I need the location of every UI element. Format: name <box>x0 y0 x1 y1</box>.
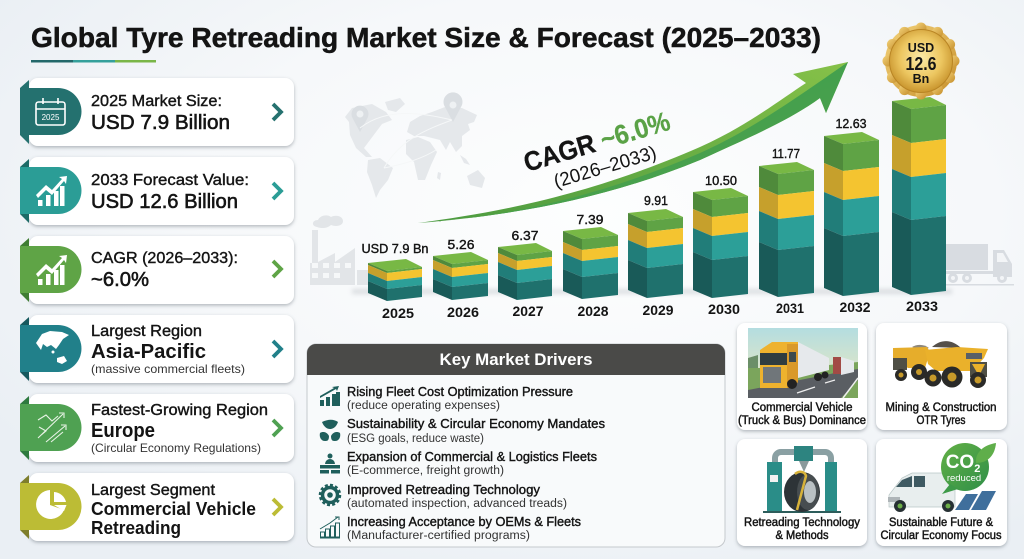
growth arrow <box>418 62 848 223</box>
KPI card: CAGR <box>20 236 294 304</box>
illustration: mining dump trucks <box>893 341 988 388</box>
icon: Asia-Pacific map <box>36 331 69 364</box>
gold medal: USD 12.6 Bn: 12.6 <box>906 53 936 74</box>
driver 2: sustainability <box>320 416 606 445</box>
KPI card: largest region: Asia-Pacific <box>91 341 206 363</box>
driver 5: OEM acceptance <box>320 514 581 542</box>
KPI card: largest segment: Commercial Vehicle <box>91 499 256 519</box>
KPI card: 2033 forecast value <box>20 157 294 225</box>
KPI card: 2033 forecast value: USD 12.6 Billion <box>91 190 238 213</box>
driver 5: OEM acceptance: (Manufacturer-certified programs) <box>347 530 530 542</box>
KPI card: largest region: (massive commercial fleets) <box>91 362 245 376</box>
KPI card: fastest-growing region: (Circular Economy Regulations) <box>91 441 261 455</box>
KPI card: largest segment: Retreading <box>91 518 181 538</box>
KPI card: fastest-growing region <box>20 394 294 462</box>
ground shadow under bars <box>352 289 952 294</box>
bar value labels: 5.26 <box>448 238 475 252</box>
tile: sustainable future: Sustainable Future & <box>889 517 993 529</box>
gold medal: USD 12.6 Bn: Bn <box>913 72 929 86</box>
illustration: van, solar panels, CO2 badge <box>888 443 996 512</box>
icon: logistics boxes <box>320 454 340 474</box>
KPI card: 2033 forecast value: 2033 Forecast Value: <box>91 172 249 189</box>
illustration: trucks on highway <box>748 328 858 398</box>
driver 1: cost optimization: Rising Fleet Cost Optimization Pressure <box>347 384 573 399</box>
driver 3: logistics fleets: Expansion of Commercial & Logistics Fleets <box>347 449 597 464</box>
panel header: Key Market Drivers <box>440 351 592 369</box>
tile: commercial vehicle <box>737 323 867 430</box>
driver 4: technology: Improved Retreading Technology <box>347 482 541 497</box>
tile: sustainable future <box>876 439 1007 546</box>
illustration: van, solar panels, CO2 badge: 2 <box>974 463 980 475</box>
bar year labels: 2030 <box>708 301 740 317</box>
driver 1: cost optimization: (reduce operating expenses) <box>347 400 500 412</box>
driver 2: sustainability: Sustainability & Circular Economy Mandates <box>347 416 606 431</box>
bar: 2028 <box>563 227 618 299</box>
illustration: van, solar panels, CO2 badge: CO <box>946 452 974 473</box>
bar value labels: 10.50 <box>705 174 737 188</box>
bar year labels: 2025 <box>382 305 414 321</box>
driver 5: OEM acceptance: Increasing Acceptance by OEMs & Fleets <box>347 514 581 529</box>
bar value labels: 12.63 <box>836 117 867 131</box>
icon: bars <box>320 386 340 406</box>
icon: recycle leaves <box>320 420 340 441</box>
driver 3: logistics fleets <box>320 449 597 477</box>
bar value labels <box>362 117 867 256</box>
bar year labels <box>382 298 938 321</box>
KPI card: CAGR: CAGR (2026–2033): <box>91 250 238 267</box>
driver 1: cost optimization <box>320 384 573 412</box>
KPI card: 2025 market size: USD 7.9 Billion <box>91 111 230 134</box>
bar: 2027 <box>498 243 552 300</box>
stacked bar chart <box>362 97 946 321</box>
icon: calendar <box>36 98 65 125</box>
tile: commercial vehicle: (Truck & Bus) Dominance <box>738 415 866 427</box>
ribbon tab: dark teal <box>20 80 82 144</box>
bar value labels: 9.91 <box>644 194 668 208</box>
tile: retreading technology: Retreading Technology <box>744 517 860 529</box>
bar year labels: 2028 <box>578 303 609 319</box>
bar value labels: 11.77 <box>772 147 800 161</box>
bar year labels: 2033 <box>906 298 938 314</box>
bar value labels: 6.37 <box>512 229 539 243</box>
bar year labels: 2027 <box>512 303 544 319</box>
icon: arrows over map <box>38 413 66 442</box>
background: truck <box>946 244 1014 286</box>
tile: commercial vehicle: Commercial Vehicle <box>752 402 852 414</box>
ribbon tab: green <box>20 238 29 302</box>
KPI card: largest segment <box>20 473 294 541</box>
driver 4: technology: (automated inspection, advanced treads) <box>347 498 567 510</box>
bar: 2031 <box>759 162 814 297</box>
bar year labels: 2032 <box>840 299 871 315</box>
KPI card: CAGR: ~6.0% <box>91 268 149 291</box>
bar value labels: USD 7.9 Bn <box>362 242 429 256</box>
KPI card: largest region: Largest Region <box>91 323 202 340</box>
driver 3: logistics fleets: (E-commerce, freight growth) <box>347 465 504 477</box>
tile: retreading technology <box>737 439 867 546</box>
panel header <box>307 344 725 375</box>
icon: rising bar chart <box>36 176 67 206</box>
title: Global Tyre Retreading Market Size & Forecast (2025–2033) <box>31 22 821 53</box>
KPI card: 2025 market size <box>20 78 294 146</box>
title underline <box>31 60 156 62</box>
bar year labels: 2026 <box>447 304 479 320</box>
bar: 2025 <box>368 259 422 301</box>
bar: 2033 <box>892 97 946 295</box>
ribbon tab: teal <box>20 159 29 223</box>
tile: retreading technology: & Methods <box>776 530 829 542</box>
tile: mining and construction <box>876 323 1007 430</box>
illustration: van, solar panels, CO2 badge: reduced <box>947 473 981 484</box>
icon: gear <box>320 485 340 505</box>
bar value labels: 7.39 <box>576 213 604 227</box>
bar: 2030 <box>693 188 748 298</box>
bar: 2029 <box>628 209 683 298</box>
driver 4: technology <box>320 482 567 510</box>
panel: key market drivers <box>307 344 725 547</box>
bar year labels: 2029 <box>642 302 674 318</box>
gold medal: USD 12.6 Bn: USD <box>908 41 934 55</box>
bar year labels: 2031 <box>776 300 804 316</box>
background: world map <box>345 92 485 198</box>
KPI card: fastest-growing region: Europe <box>91 420 155 442</box>
CAGR label: CAGR ~6.0% <box>520 106 673 178</box>
icon: outlined bars <box>320 517 340 538</box>
background: factory <box>310 215 369 285</box>
driver 2: sustainability: (ESG goals, reduce waste) <box>347 433 484 445</box>
tile: sustainable future: Circular Economy Focus <box>880 530 1002 542</box>
bar: 2032 <box>824 132 879 296</box>
KPI card: largest region <box>20 315 294 383</box>
ribbon tab: olive <box>20 475 29 539</box>
gold medal: USD 12.6 Bn <box>882 22 960 100</box>
ribbon tab: mid green <box>20 396 29 460</box>
CAGR label: (2026–2033) <box>551 143 659 193</box>
KPI card: fastest-growing region: Fastest-Growing Region <box>91 402 268 419</box>
ribbon tab: blue-teal <box>20 317 29 381</box>
tile: mining and construction: OTR Tyres <box>916 415 966 427</box>
tile: mining and construction: Mining & Construction <box>886 402 996 414</box>
illustration: tyre retreading machine <box>763 446 841 513</box>
icon: growth chart <box>36 255 67 285</box>
KPI card: 2025 market size: 2025 <box>42 113 60 122</box>
bar: 2026 <box>433 252 488 300</box>
icon: pie chart <box>36 490 66 519</box>
KPI card: largest segment: Largest Segment <box>91 482 216 499</box>
KPI card: 2025 market size: 2025 Market Size: <box>91 93 222 110</box>
